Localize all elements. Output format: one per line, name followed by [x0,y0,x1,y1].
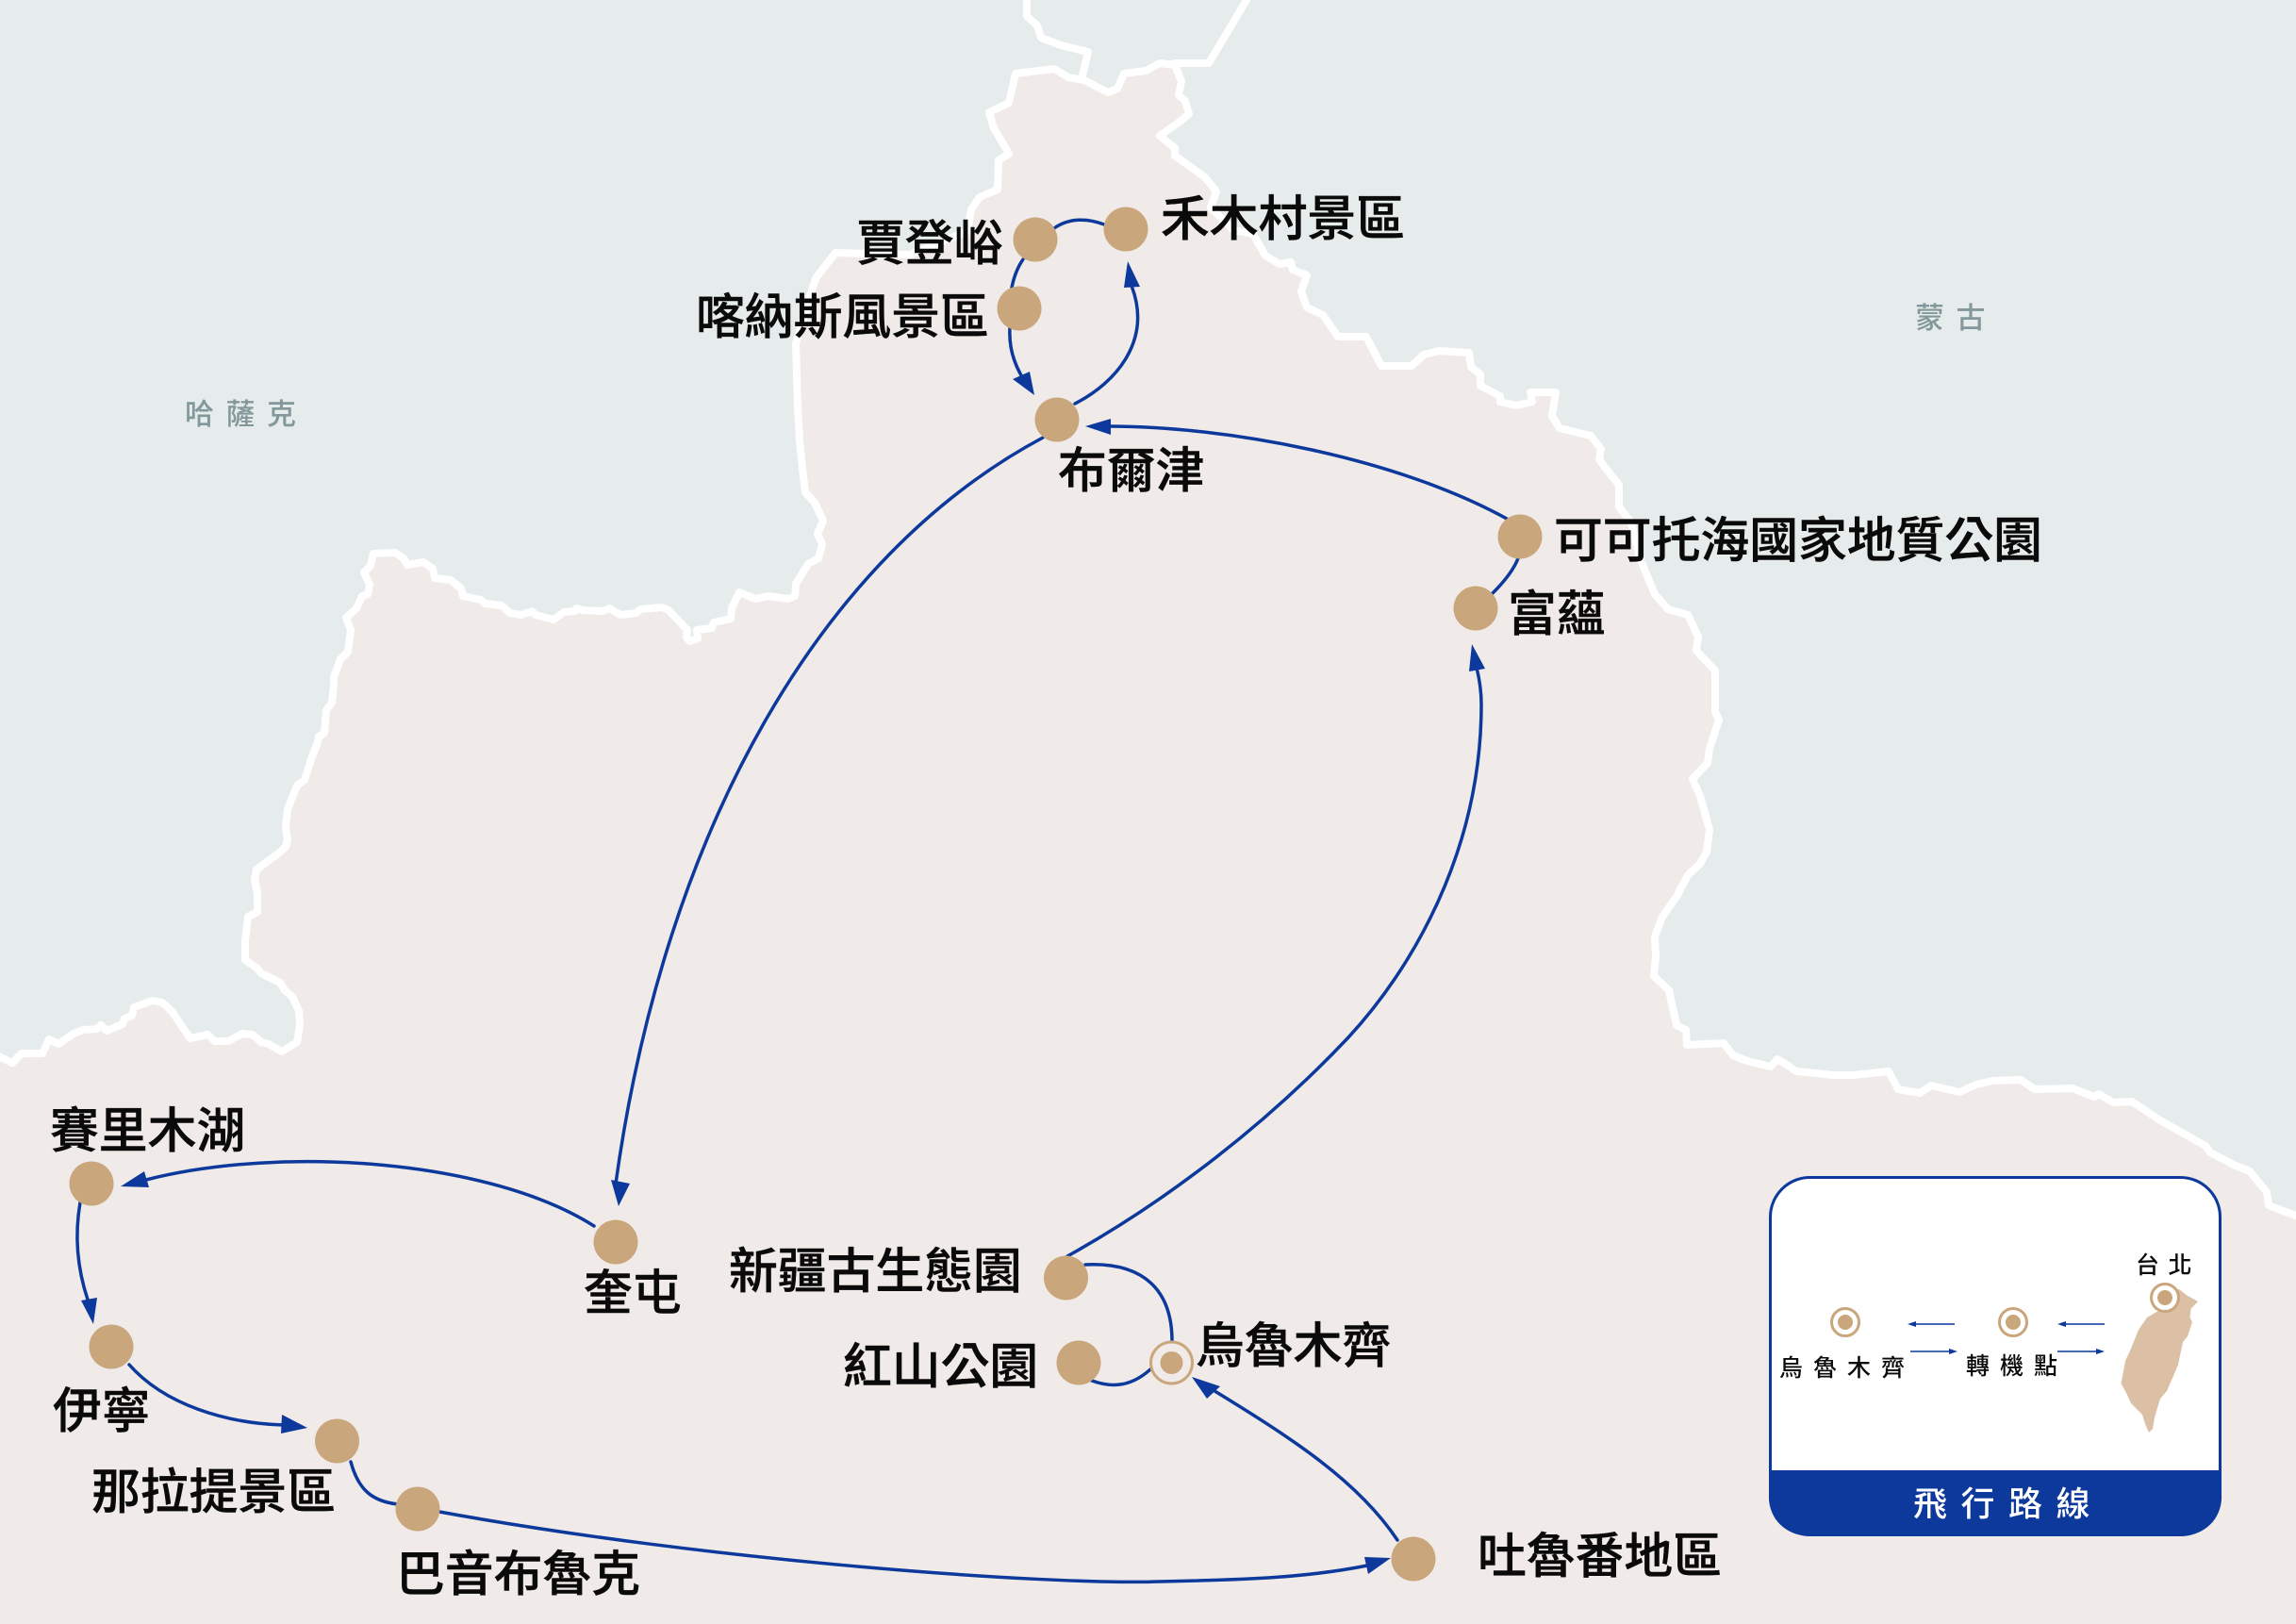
label: Yining: 伊寧 [53,1384,151,1438]
arrow: into Urumqi [1192,1377,1220,1399]
route: Turpan to Urumqi [1212,1389,1397,1540]
legend title bar [1769,1470,2222,1535]
marker: Koktokay [1497,515,1543,558]
label: Sayram Lake: 賽里木湖 [50,1103,245,1158]
icon: Taiwan island [2122,1289,2198,1433]
marker: Urumqi ringed hub [1150,1342,1192,1384]
legend title: 飛行路線 [1913,1484,2104,1523]
marker: Nalati [315,1418,359,1464]
route: Burqin to Hemu [1075,286,1138,404]
marker: Xinjiang paleo-ecological park [1044,1256,1088,1300]
marker: Yining [89,1324,134,1369]
marker: Taipei [2152,1284,2178,1311]
label: Urumqi: 烏魯木齊 [1196,1318,1391,1373]
arrow: into Hemu [1124,261,1140,288]
legend panel: flight route [1769,1177,2222,1535]
marker: Jiadengyu [1013,217,1058,262]
label: Bayanbulak: 巴音布魯克 [396,1547,640,1601]
marker: Sayram Lake [70,1162,113,1205]
label: Fuyun: 富蘊 [1508,587,1606,641]
route: Fuyun to Koktokay [1493,558,1518,593]
route: Nalati to Bayanbulak [351,1462,398,1504]
label: Urumqi: 烏魯木齊 [1779,1355,1915,1382]
label: Burqin: 布爾津 [1058,443,1204,498]
arrow: into Yining [81,1298,97,1324]
route: paleo-ecological park to Fuyun [1067,668,1481,1256]
stop markers [70,207,1543,1581]
marker: Hongshan Park [1056,1341,1101,1384]
arrow: into Sayram Lake [121,1171,149,1187]
map: white national borders [0,0,2296,1218]
label: Taipei: 台北 [2136,1252,2201,1279]
place labels [50,191,2042,1601]
marker: Turpan [1392,1537,1435,1581]
arrow: into Burqin from east [1085,419,1111,435]
label: Hongshan Park: 紅山公園 [843,1339,1038,1394]
arrow: into Turpan [1364,1557,1391,1574]
marker: Urumqi [1831,1309,1859,1335]
arrow: into Kuytun [611,1180,630,1206]
route: Kanas to Burqin [1010,328,1021,375]
label: Xinjiang paleo-ecological park: 新疆古生態園 [729,1244,1022,1299]
country label: Mongolia: 蒙古 [1915,302,1997,335]
flight routes [77,220,1518,1582]
marker: Kuytun [594,1220,637,1264]
route: Yining to Nalati [129,1365,283,1425]
country label: Kazakhstan: 哈薩克 [185,398,307,431]
label: Kanas: 喀納斯風景區 [696,290,989,344]
label: Hemu: 禾木村景區 [1161,191,1405,246]
route: Koktokay to Burqin [1109,426,1507,519]
route: Urumqi to Hongshan Park [1092,1369,1150,1384]
label: Koktokay: 可可托海國家地質公園 [1554,513,2042,568]
marker: Hemu [1103,207,1148,251]
label: Kuytun: 奎屯 [584,1266,682,1320]
route: Urumqi to Xinjiang paleo-ecological park [1085,1265,1172,1341]
arrow: Urumqi to transfer [1910,1349,1957,1354]
label: Turpan: 吐魯番地區 [1478,1529,1722,1583]
marker: Burqin [1035,398,1079,441]
arrow: into Nalati [281,1415,307,1433]
route: Hemu to Jiadengyu [1054,220,1104,228]
marker: transfer point [1999,1309,2027,1335]
arrow: transfer to Taipei [2057,1349,2105,1354]
route: Burqin to Kuytun [616,438,1043,1184]
label: Jiadengyu: 賈登峪 [856,216,1002,271]
label: transfer point: 轉機點 [1966,1353,2068,1380]
arrow: transfer to Urumqi [1908,1321,1955,1327]
route: Sayram Lake to Yining [77,1202,88,1300]
marker: Kanas [998,287,1041,330]
marker: Fuyun [1454,587,1497,630]
legend frame [1771,1177,2220,1535]
label: Nalati: 那拉提景區 [91,1465,336,1519]
marker: Bayanbulak [396,1486,439,1532]
route: Bayanbulak to Turpan [439,1512,1367,1582]
arrow: Taipei to transfer [2057,1321,2105,1327]
arrow: into Burqin from north [1013,372,1034,395]
route: Jiadengyu to Kanas [1012,259,1023,288]
arrow: into Fuyun [1469,644,1485,671]
route: Kuytun to Sayram Lake [146,1162,594,1226]
